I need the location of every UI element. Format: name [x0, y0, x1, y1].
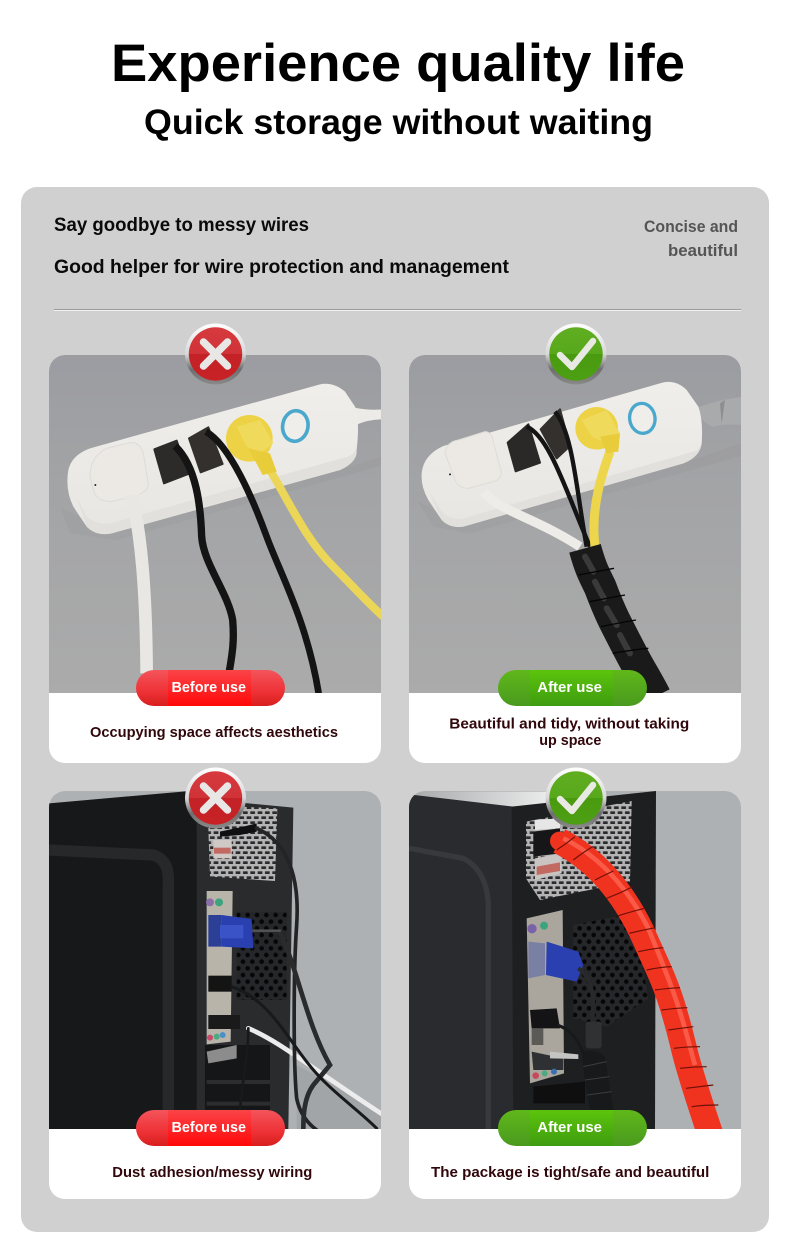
icon: green check badge — [546, 768, 606, 828]
text block: intro headings: Good helper for wire protection and management — [54, 257, 510, 278]
panel: main grey background — [21, 187, 769, 1232]
caption: up space — [539, 732, 601, 749]
panel: after use, power strip — [400, 324, 750, 763]
photo: messy power strip — [40, 350, 390, 697]
caption: Dust adhesion/messy wiring — [112, 1164, 312, 1181]
panel: before use, computer — [40, 768, 390, 1199]
text block: intro headings — [54, 215, 510, 278]
photo: computer with messy cables — [40, 788, 390, 1132]
button: before use — [136, 1110, 285, 1146]
caption: Occupying space affects aesthetics — [90, 724, 338, 741]
photo: computer with red spiral wrap — [400, 788, 750, 1133]
button: after use: After use — [537, 680, 602, 696]
icon: red cross badge — [185, 324, 246, 384]
button: after use — [498, 1110, 647, 1146]
subtitle: Quick storage without waiting — [144, 103, 653, 142]
caption: Beautiful and tidy, without taking — [449, 716, 689, 732]
panel: after use, computer — [400, 768, 750, 1199]
title: Experience quality life — [111, 34, 685, 93]
button: before use: Before use — [172, 1120, 246, 1136]
text block: concise and beautiful: Concise and — [644, 217, 738, 236]
caption: The package is tight/safe and beautiful — [431, 1164, 709, 1181]
text block: intro headings: Say goodbye to messy wires — [54, 215, 309, 236]
caption — [449, 716, 689, 749]
text block: concise and beautiful: beautiful — [668, 241, 738, 260]
photo: tidy power strip with black spiral wrap — [400, 350, 750, 697]
text block: concise and beautiful — [644, 217, 738, 260]
button: after use — [498, 670, 647, 706]
panel: before use, power strip — [40, 324, 390, 763]
button: after use: After use — [537, 1120, 602, 1136]
icon: green check badge — [546, 324, 606, 384]
button: before use — [136, 670, 285, 706]
button: before use: Before use — [172, 680, 246, 696]
icon: red cross badge — [185, 768, 246, 828]
